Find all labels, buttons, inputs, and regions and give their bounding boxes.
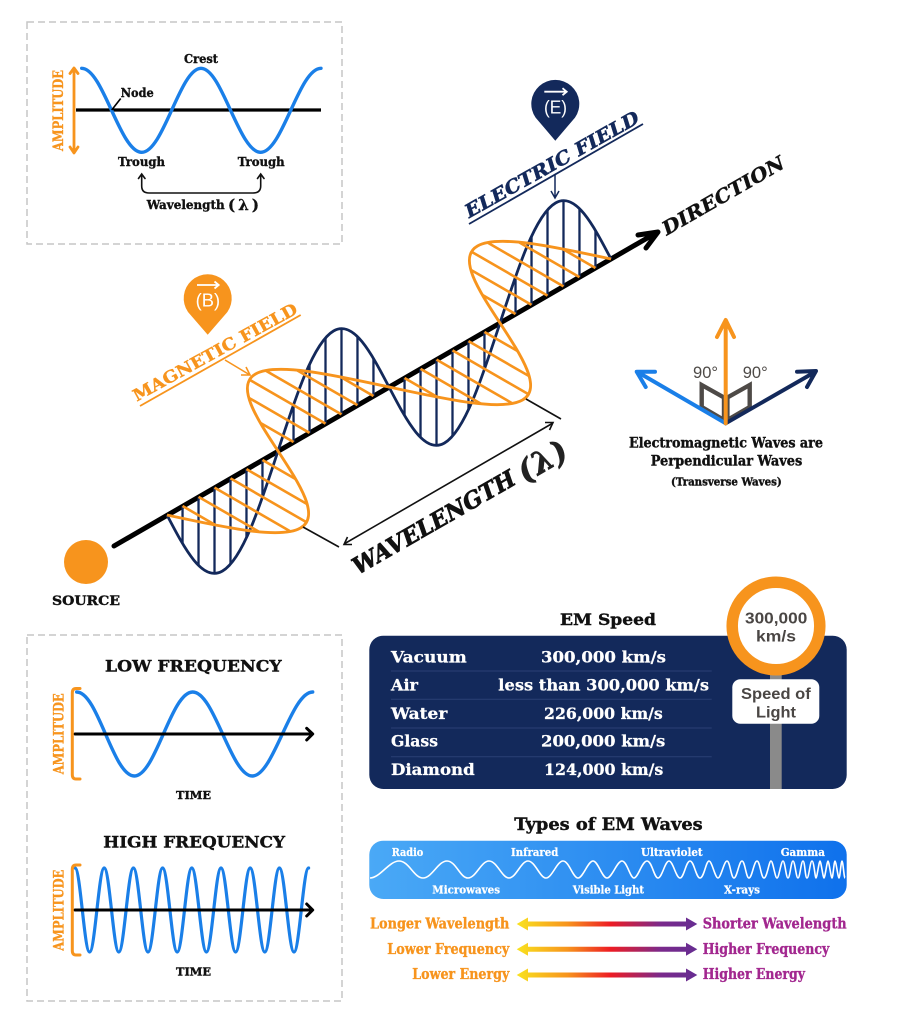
angle label left: 90°: [693, 363, 718, 382]
perpendicular waves diagram: [637, 320, 816, 423]
direction axis arrow: [114, 232, 658, 546]
air row: Air: [390, 676, 419, 695]
spectrum labels: Infrared: [511, 845, 558, 859]
vacuum row: Vacuum: [390, 648, 467, 667]
em speed heading: EM Speed: [560, 610, 656, 629]
magnetic field label: MAGNETIC FIELD: [129, 299, 301, 405]
perpendicular caption: [629, 436, 823, 489]
vacuum row: 300,000 km/s: [541, 648, 666, 667]
low amplitude label: AMPLITUDE: [51, 693, 67, 775]
spectrum labels: [392, 845, 825, 896]
high frequency wave: [75, 868, 309, 952]
spectrum labels: Microwaves: [432, 882, 500, 896]
wavelength comparison row: Shorter Wavelength: [703, 915, 847, 932]
speed of light sign: Speed of: [741, 686, 812, 703]
water row: Water: [390, 704, 448, 723]
frequency comparison row: Higher Frequency: [703, 941, 830, 958]
wavelength comparison row: Longer Wavelength: [370, 915, 510, 932]
wavelength label: Wavelength: [146, 197, 225, 212]
icon: electric field pin: (E): [544, 97, 567, 117]
spectrum wave: [370, 861, 845, 878]
high time label: TIME: [176, 965, 211, 979]
magnetic field wave: [89, 214, 689, 560]
node leader: [112, 98, 121, 110]
direction label: DIRECTION: [657, 152, 789, 241]
spectrum labels: Ultraviolet: [641, 845, 703, 859]
frequency comparison row: Lower Frequency: [387, 941, 510, 958]
energy comparison row: [412, 966, 805, 983]
node label: Node: [121, 85, 154, 100]
panel: frequency: [27, 635, 342, 1001]
diamond row: Diamond: [391, 760, 475, 779]
sine wave: [82, 68, 321, 152]
wavelength dimension: [303, 399, 561, 547]
angle label right: 90°: [743, 363, 768, 382]
air row: less than 300,000 km/s: [498, 676, 709, 695]
wavelength lambda: (λ): [512, 434, 574, 490]
electric field arrow: [551, 175, 559, 198]
crest label: Crest: [184, 51, 218, 66]
high amplitude label: AMPLITUDE: [51, 870, 67, 952]
spectrum labels: Radio: [392, 845, 424, 859]
lambda symbol: ( λ ): [228, 196, 259, 214]
spectrum labels: Visible Light: [572, 882, 645, 896]
low frequency wave: [77, 692, 313, 776]
blue arrow: [637, 372, 726, 423]
trough label left: Trough: [118, 154, 165, 169]
speed of light sign: [732, 582, 820, 789]
types of em waves heading: Types of EM Waves: [514, 815, 703, 835]
spectrum labels: X-rays: [724, 882, 760, 896]
energy comparison row: Lower Energy: [412, 966, 510, 983]
water row: [390, 704, 663, 723]
icon: magnetic field pin: [184, 274, 232, 335]
diamond row: 124,000 km/s: [544, 760, 664, 779]
panel: wave anatomy: [27, 22, 342, 244]
right angle markers: [702, 385, 750, 420]
low frequency axis: [75, 728, 313, 740]
icon: magnetic field pin: (B): [196, 291, 220, 311]
main wave diagram: [89, 171, 689, 603]
glass row: 200,000 km/s: [541, 732, 666, 751]
energy comparison row: Higher Energy: [703, 966, 805, 983]
wavelength main label: WAVELENGTH: [348, 464, 522, 580]
icon: electric field pin: [531, 80, 579, 141]
high frequency bracket: [72, 865, 80, 955]
high frequency heading: HIGH FREQUENCY: [103, 833, 286, 852]
glass row: [391, 732, 666, 751]
electric field label: ELECTRIC FIELD: [460, 108, 643, 223]
glass row: Glass: [391, 732, 438, 751]
diamond row: [391, 760, 664, 779]
speed of light sign: Light: [756, 704, 796, 721]
panel: em speed table: [369, 636, 847, 789]
amplitude label: AMPLITUDE: [51, 70, 67, 152]
orange arrow: [717, 320, 734, 423]
perpendicular caption: (Transverse Waves): [671, 476, 782, 489]
electric field wave: [167, 171, 611, 603]
magnetic field arrow: [225, 360, 250, 375]
water row: 226,000 km/s: [544, 704, 663, 723]
air row: [390, 676, 709, 695]
trough label right: Trough: [238, 154, 285, 169]
low time label: TIME: [176, 788, 211, 802]
node axis line: [76, 108, 321, 112]
wavelength comparison row: [370, 915, 847, 932]
amplitude arrow: [70, 68, 78, 153]
spectrum labels: Gamma: [781, 845, 825, 859]
spectrum bar: [369, 841, 847, 899]
wavelength bracket arrow: [138, 174, 264, 193]
navy arrow: [726, 371, 816, 423]
high frequency axis: [75, 904, 313, 916]
speed of light sign: 300,000: [745, 610, 807, 627]
speed of light sign: km/s: [756, 629, 796, 646]
vacuum row: [390, 648, 666, 667]
source circle: [64, 540, 108, 584]
low frequency heading: LOW FREQUENCY: [105, 657, 282, 676]
frequency comparison row: [387, 941, 830, 958]
source label: SOURCE: [52, 594, 120, 609]
perpendicular caption: Electromagnetic Waves are: [629, 436, 823, 452]
perpendicular caption: Perpendicular Waves: [651, 454, 803, 470]
low frequency bracket: [72, 688, 80, 779]
